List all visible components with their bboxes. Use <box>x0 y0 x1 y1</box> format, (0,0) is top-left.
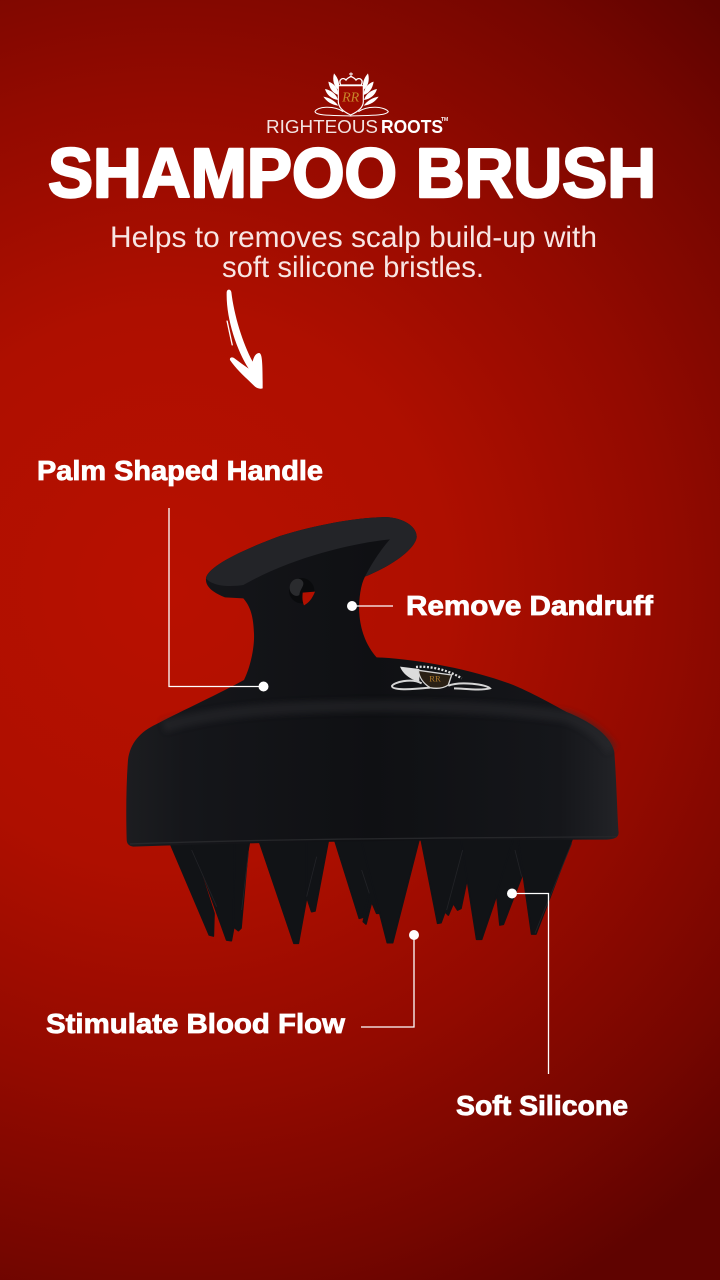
brand emblem on brush <box>392 667 490 690</box>
trademark: TM <box>441 117 448 123</box>
shampoo brush product <box>126 517 619 943</box>
arrow pointing down <box>226 290 263 389</box>
callout: soft silicone <box>456 888 628 1121</box>
brand logo <box>266 72 448 137</box>
callout: stimulate blood flow: Stimulate Blood Flow <box>46 1008 345 1039</box>
handle hole <box>289 578 315 605</box>
handle plate rim <box>206 517 417 586</box>
callout: palm shaped handle <box>37 455 323 692</box>
logo emblem <box>315 72 388 116</box>
logo wordmark: RIGHTEOUS <box>266 117 378 137</box>
callout: remove dandruff: Remove Dandruff <box>406 590 654 621</box>
callout: stimulate blood flow <box>46 930 419 1039</box>
brand emblem on brush: RR <box>429 674 441 684</box>
dome shading <box>163 706 612 750</box>
subtitle <box>110 221 597 284</box>
callout: palm shaped handle: Palm Shaped Handle <box>37 455 323 486</box>
rim highlight <box>130 837 617 844</box>
callout: soft silicone: Soft Silicone <box>456 1090 628 1121</box>
subtitle: soft silicone bristles. <box>222 251 484 284</box>
brush body and handle <box>126 517 619 847</box>
bristle highlights <box>192 843 572 933</box>
logo wordmark <box>266 117 443 137</box>
bristles <box>166 833 574 943</box>
title: SHAMPOO BRUSH <box>48 134 656 212</box>
subtitle: Helps to removes scalp build-up with <box>110 221 597 254</box>
logo wordmark: ROOTS <box>381 117 443 137</box>
logo emblem: RR <box>341 91 360 106</box>
